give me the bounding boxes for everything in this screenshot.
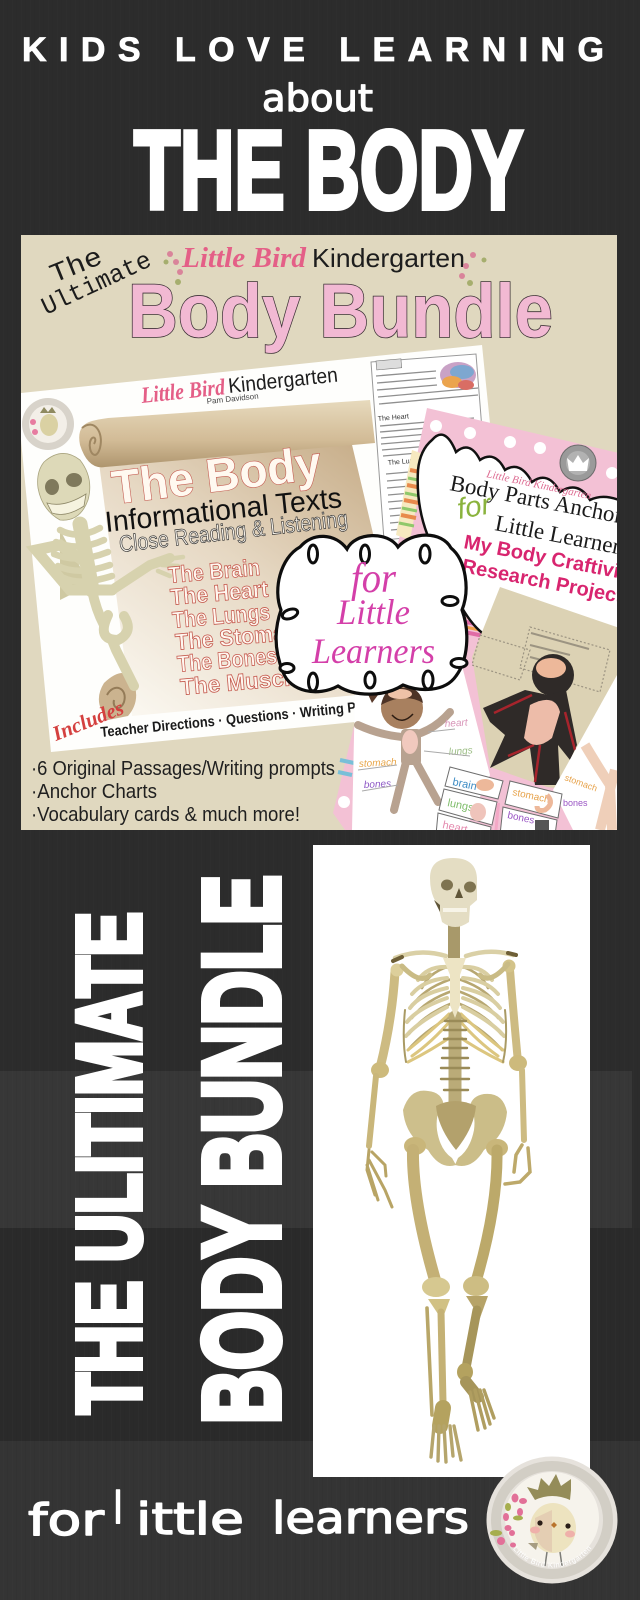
text: for little learners: ittle xyxy=(136,1494,244,1545)
text: for little learners: learners xyxy=(272,1493,469,1544)
panel: product collage xyxy=(21,235,640,836)
feet xyxy=(440,1408,443,1426)
sheet logo: Little Bird xyxy=(139,374,226,408)
passages page: The Lungs xyxy=(388,457,422,467)
chart text: Little Learners xyxy=(493,510,631,561)
chart text: Little Bird Kindergarten xyxy=(484,468,593,502)
brain image xyxy=(440,362,476,390)
vocabulary cards xyxy=(436,767,562,836)
title: kids love learning: KIDS LOVE LEARNING xyxy=(22,31,604,69)
chart text: Research Project xyxy=(460,555,625,608)
sheet: girl figure xyxy=(352,668,490,830)
list of body parts: The Bones xyxy=(176,642,278,677)
logo: little bird kindergarten xyxy=(164,243,486,286)
text: for little learners: for xyxy=(28,1495,105,1546)
scroll heading: the body: The Body xyxy=(109,436,324,514)
bullet list: ·Anchor Charts xyxy=(31,781,157,803)
bird xyxy=(530,1503,576,1553)
panel: skeleton photo xyxy=(313,845,590,1477)
list of body parts: The Muscles xyxy=(179,662,316,700)
vocabulary cards: stomach xyxy=(511,787,551,806)
arm bones xyxy=(367,960,530,1207)
pelvis xyxy=(403,1091,507,1166)
sternum xyxy=(443,958,466,1018)
girl labels: bones xyxy=(364,779,391,791)
ribs back xyxy=(408,965,502,1050)
passages page xyxy=(371,354,490,540)
spine xyxy=(448,925,460,958)
scroll subheading xyxy=(106,490,348,552)
sheet logo: Pam Davidson xyxy=(206,392,259,406)
sheet: anchor charts pink xyxy=(333,408,640,836)
cloud label: for little learners: Little xyxy=(336,592,410,632)
logo: little bird kindergarten: Kindergarten xyxy=(312,243,465,273)
skeleton xyxy=(367,858,530,1462)
chart text: My Body Craftivity xyxy=(462,531,639,587)
sheet: right figure: stomach xyxy=(563,772,599,794)
bullet list: ·6 Original Passages/Writing prompts xyxy=(31,758,335,780)
skull xyxy=(430,858,477,927)
bullet list: ·Vocabulary cards & much more! xyxy=(31,804,300,826)
heading: the ultimate: The xyxy=(46,243,107,291)
chart text xyxy=(450,470,617,602)
list of body parts: The Brain xyxy=(167,554,261,588)
girl labels: stomach xyxy=(359,757,397,770)
icon: crown button xyxy=(560,445,596,481)
sheet logo: Kindergarten xyxy=(227,364,339,398)
vocabulary cards: bones xyxy=(506,810,535,827)
cartoon skeleton xyxy=(36,453,183,686)
text: for little learners xyxy=(28,1483,469,1546)
cloud label: for little learners xyxy=(276,535,467,694)
cloud label: for little learners: for xyxy=(351,556,397,602)
stripes xyxy=(338,450,488,775)
mini badge xyxy=(22,398,74,450)
girl labels: heart xyxy=(444,717,469,730)
shins xyxy=(428,1299,450,1320)
leaves xyxy=(497,1494,527,1548)
girl labels: lungs xyxy=(448,745,473,758)
sheet: right figure: bones xyxy=(563,798,588,808)
text: for little learners: l xyxy=(113,1483,123,1534)
black figure xyxy=(483,654,577,785)
vocabulary cards: brain xyxy=(451,776,478,793)
craft photo xyxy=(472,587,617,788)
girl labels xyxy=(359,717,473,791)
vertical title: the ultimate: THE ULITIMATE xyxy=(60,912,160,1414)
ribs front xyxy=(406,967,504,1036)
logo: little bird kindergarten: Little Bird xyxy=(181,243,307,274)
list of body parts: The Heart xyxy=(169,576,269,610)
badge: little bird xyxy=(486,1456,618,1584)
passages page: The Heart xyxy=(378,413,409,423)
heading: the ultimate: Ultimate xyxy=(37,246,156,322)
title: about: about xyxy=(262,77,373,120)
includes line xyxy=(52,702,355,742)
speech bubble xyxy=(416,433,617,634)
bullet list xyxy=(31,758,335,826)
sheet: right figure xyxy=(553,675,617,830)
list of body parts: The Lungs xyxy=(171,599,271,633)
scroll subheading: Informational Texts xyxy=(103,482,343,539)
femurs xyxy=(404,1137,426,1155)
girl xyxy=(358,687,450,810)
cartilage xyxy=(408,1014,503,1062)
list of body parts xyxy=(168,559,290,695)
heading: body bundle: Body Bundle xyxy=(128,269,553,354)
vocabulary cards: heart xyxy=(441,819,468,836)
sheet logo xyxy=(142,370,338,404)
includes line: Teacher Directions · Questions · Writing Prompts xyxy=(100,696,400,741)
scroll xyxy=(79,400,375,720)
cloud label: for little learners: Learners xyxy=(311,631,435,671)
vertical title: body bundle: BODY BUNDLE xyxy=(180,875,302,1424)
chart text: Body Parts Anchor xyxy=(448,470,625,528)
badge text: Little Bird Kindergarten xyxy=(514,1546,592,1568)
includes line: Includes xyxy=(48,695,127,746)
sheet: informational texts xyxy=(21,345,512,752)
vocabulary cards: lungs xyxy=(446,797,475,815)
chart text: for xyxy=(455,488,495,526)
collarbones xyxy=(395,952,513,958)
list of body parts: The Stomach xyxy=(174,617,311,655)
scroll subheading: Close Reading & Listening xyxy=(118,505,349,557)
